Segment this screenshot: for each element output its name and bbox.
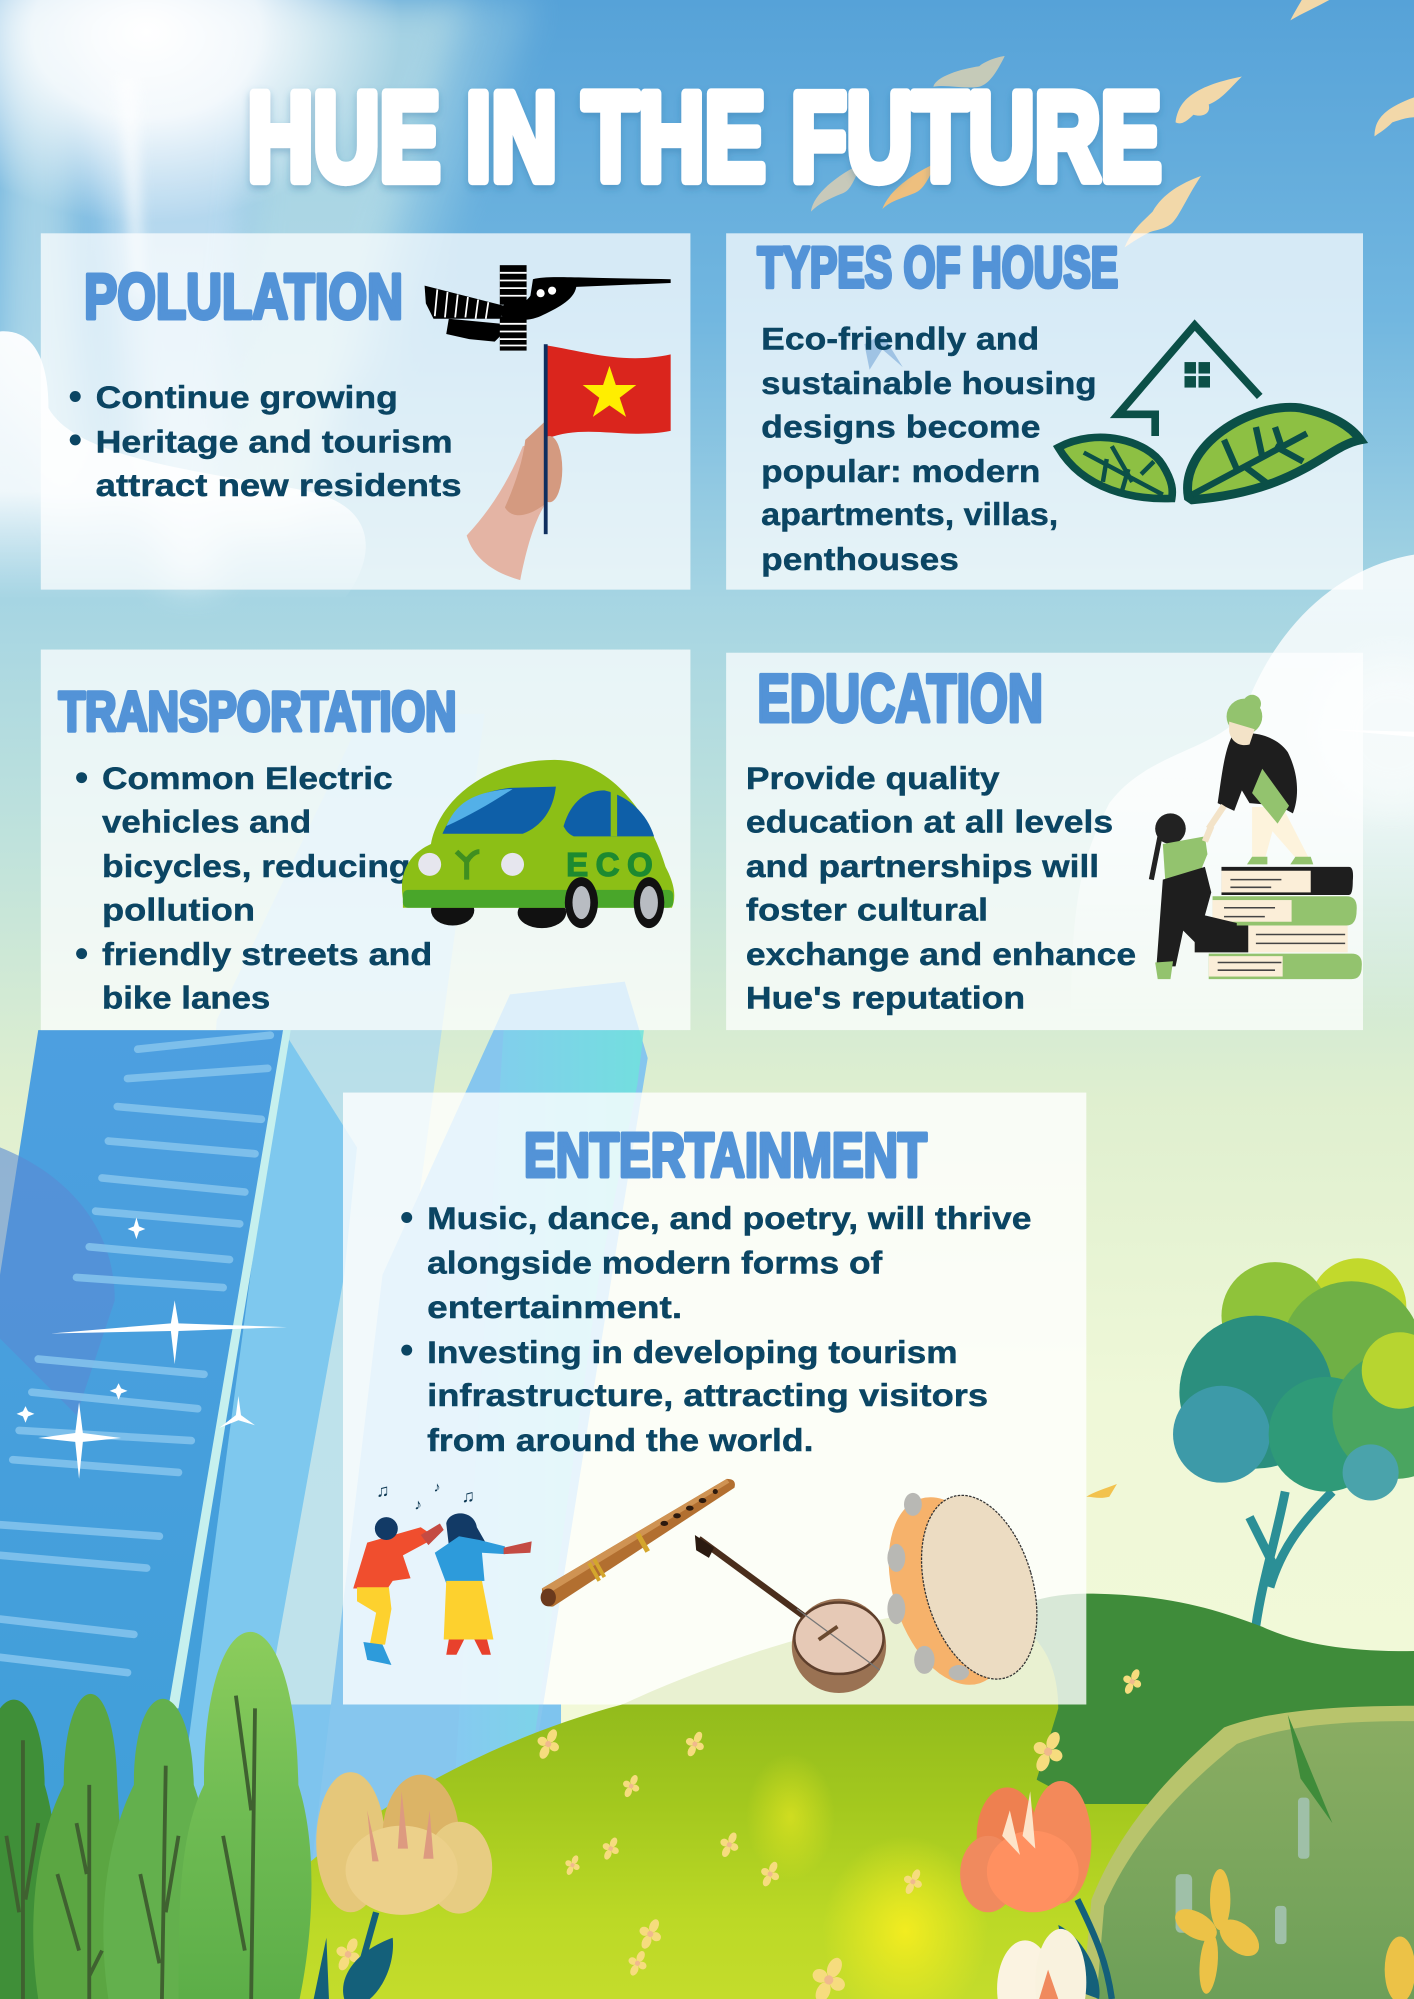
text: types of house: apartments, villas, xyxy=(761,496,1058,532)
bullet list: transportation: bicycles, reducing xyxy=(102,848,411,884)
bullet list: population: Continue growing xyxy=(96,379,398,415)
meadow glow xyxy=(746,1753,988,1999)
icon: bamboo flute xyxy=(541,1479,735,1607)
icon: heritage bird xyxy=(425,265,671,351)
panel: population xyxy=(41,233,690,590)
icon: eco house with leaves xyxy=(1058,325,1360,500)
text: education: Provide quality xyxy=(746,760,1000,796)
orange tulip xyxy=(960,1781,1112,1999)
text: education: exchange and enhance xyxy=(746,936,1136,972)
text: types of house xyxy=(761,320,1097,577)
younger girl xyxy=(1151,813,1237,979)
skyscrapers xyxy=(0,714,648,1925)
bullet list: population xyxy=(70,379,462,503)
bullet list: population: Heritage and tourism xyxy=(96,424,453,460)
bullet list: entertainment: from around the world. xyxy=(427,1422,813,1458)
text: education: Hue's reputation xyxy=(746,979,1025,1015)
text: types of house: Eco-friendly and xyxy=(761,320,1039,356)
yellow tulip xyxy=(314,1772,492,1999)
heading: population: POLULATION xyxy=(84,261,403,333)
panel: education xyxy=(726,653,1363,1030)
text: types of house: designs become xyxy=(761,408,1040,444)
bullet list: transportation: vehicles and xyxy=(102,803,311,839)
text: education: and partnerships will xyxy=(746,848,1099,884)
bullet list: transportation xyxy=(76,760,432,1015)
clouds xyxy=(0,331,1414,1020)
bullet list: entertainment xyxy=(401,1200,1031,1458)
yellow flowers on the hill xyxy=(330,1665,1146,1999)
sun rays xyxy=(0,0,536,586)
heading: education: EDUCATION xyxy=(757,662,1043,737)
text: education xyxy=(746,760,1136,1015)
text: types of house: popular: modern xyxy=(761,453,1040,489)
heading: types of house: TYPES OF HOUSE xyxy=(757,236,1118,300)
text: types of house: penthouses xyxy=(761,541,959,577)
text: education: foster cultural xyxy=(746,891,988,927)
sparkles xyxy=(17,1218,287,1479)
bullet list: entertainment: Investing in developing tourism xyxy=(427,1334,958,1370)
icon: dancing couple with music notes: ♪ xyxy=(434,1479,441,1495)
rock on the right xyxy=(1082,1706,1414,1999)
flying birds xyxy=(811,0,1414,1498)
panel: entertainment xyxy=(343,1093,1086,1705)
panel: types of house xyxy=(726,233,1363,590)
yellow clover on rock xyxy=(1170,1869,1414,1999)
top-right tree xyxy=(1173,1258,1414,1625)
icon: tambourine xyxy=(867,1482,1057,1701)
icon: dancing couple with music notes: ♫ xyxy=(462,1486,475,1506)
icon: green eco car: ECO xyxy=(566,847,653,884)
panel: transportation xyxy=(41,650,690,1030)
icon: dancing couple with music notes: ♫ xyxy=(376,1481,390,1501)
bullet list: entertainment: infrastructure, attracting visitors xyxy=(427,1377,988,1413)
older girl xyxy=(1209,695,1313,864)
icon: girls climbing stack of books xyxy=(1151,695,1362,979)
bullet list: entertainment: entertainment. xyxy=(427,1289,682,1325)
white flower xyxy=(997,1929,1086,1999)
text: types of house: sustainable housing xyxy=(761,365,1097,401)
bullet list: entertainment: alongside modern forms of xyxy=(427,1245,883,1281)
icon: green eco car xyxy=(402,760,674,928)
bullet list: population: attract new residents xyxy=(96,467,462,503)
icon: dancing couple with music notes: ♪ xyxy=(414,1496,422,1513)
lime meadow hill xyxy=(296,1608,1148,1999)
heading: transportation: TRANSPORTATION xyxy=(59,680,456,743)
bullet list: transportation: Common Electric xyxy=(102,760,393,796)
bullet list: entertainment: Music, dance, and poetry, will thrive xyxy=(427,1200,1031,1236)
bullet list: transportation: pollution xyxy=(102,891,255,927)
faint bird mark xyxy=(864,334,903,370)
icon: dancing couple with music notes xyxy=(353,1479,532,1665)
left trees xyxy=(0,1632,311,1999)
bullet list: transportation: friendly streets and xyxy=(102,936,432,972)
text: education: education at all levels xyxy=(746,803,1113,839)
icon: hand holding Vietnamese flag xyxy=(467,344,671,580)
heading: entertainment: ENTERTAINMENT xyxy=(524,1121,927,1191)
bullet list: transportation: bike lanes xyxy=(102,979,270,1015)
icon: banjo xyxy=(695,1535,886,1693)
book stack xyxy=(1195,867,1362,979)
dark green hill xyxy=(893,1594,1414,1836)
